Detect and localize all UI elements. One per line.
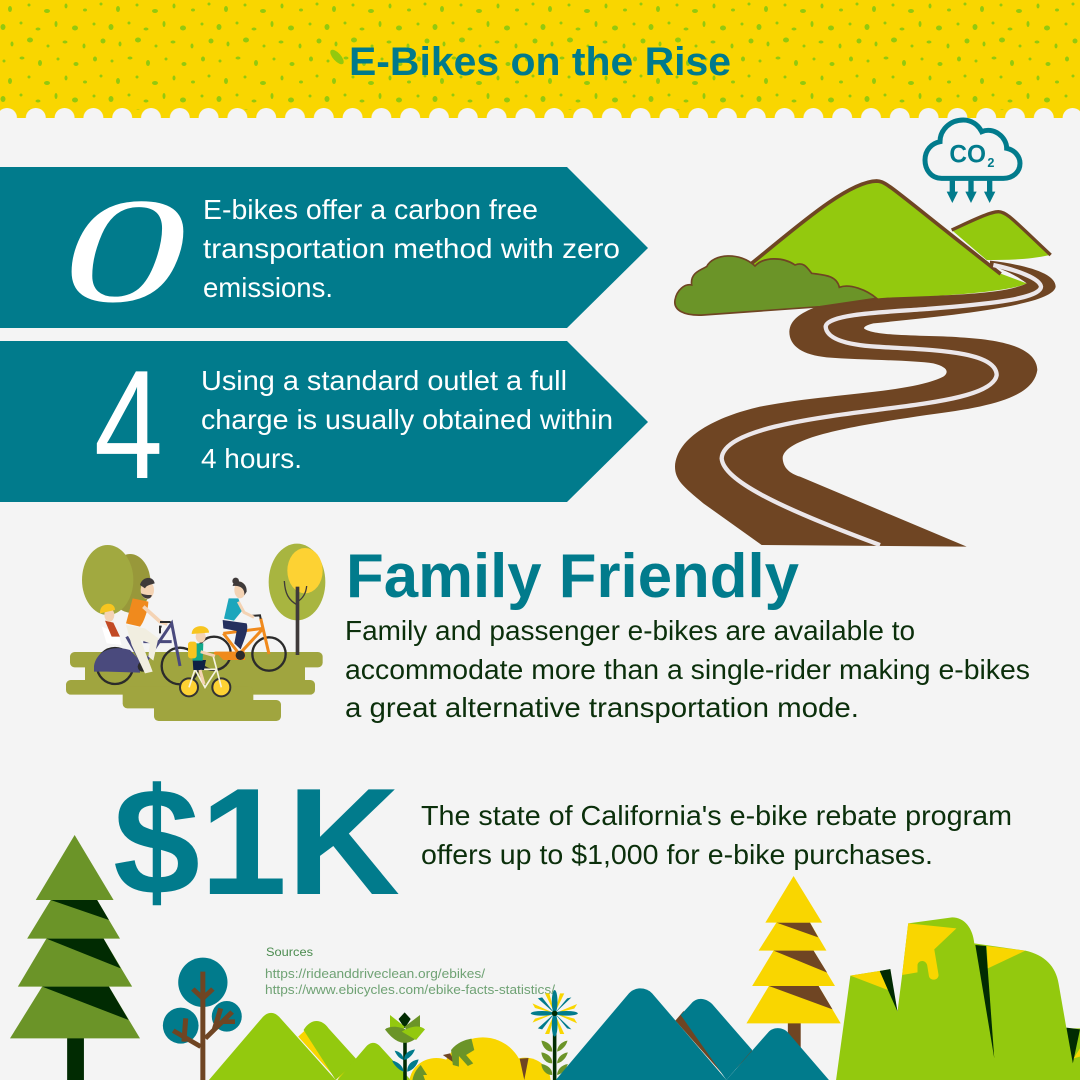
text block: California rebate: The state of California's e-bike rebate program bbox=[421, 800, 1012, 831]
road bbox=[675, 261, 1056, 547]
big stat: $1K: $1K bbox=[113, 757, 400, 927]
sources: https://rideanddriveclean.org/ebikes/ bbox=[265, 967, 486, 981]
green cliffs bbox=[836, 917, 1080, 1080]
panel: four hours arrow banner bbox=[0, 338, 648, 511]
sources bbox=[265, 945, 556, 997]
charge time text: charge is usually obtained within bbox=[201, 404, 613, 435]
big number 4: 4 bbox=[94, 338, 163, 511]
illustration: family riding bikes bbox=[66, 544, 325, 721]
sources: https://www.ebicycles.com/ebike-facts-statistics/ bbox=[265, 983, 556, 997]
zero emissions text: transportation method with zero bbox=[203, 233, 620, 264]
small hill bbox=[952, 212, 1050, 260]
tulip plant bbox=[385, 1012, 425, 1080]
text block: family and passenger e-bikes: accommodate more than a single-rider making e-bikes bbox=[345, 654, 1030, 685]
green pine tree bbox=[10, 835, 140, 1080]
left trees bbox=[109, 554, 151, 613]
daisy flower bbox=[531, 990, 578, 1080]
charge time text: 4 hours. bbox=[201, 443, 302, 474]
zero emissions text: E-bikes offer a carbon free bbox=[203, 194, 538, 225]
child on yellow bike bbox=[180, 626, 230, 696]
yellow bush bbox=[409, 1037, 551, 1080]
header band with speckled pattern and scalloped edge bbox=[0, 0, 1080, 118]
teal mountains bbox=[556, 988, 829, 1080]
right tree bbox=[269, 544, 325, 620]
text block: California rebate: offers up to $1,000 for e-bike purchases. bbox=[421, 839, 933, 870]
bottom right scenery bbox=[531, 876, 1080, 1080]
bush bbox=[675, 256, 877, 315]
zero emissions text bbox=[203, 194, 620, 303]
zero emissions text: emissions. bbox=[203, 272, 333, 303]
text block: family and passenger e-bikes: Family and passenger e-bikes are available to bbox=[345, 615, 915, 646]
green mountains bbox=[209, 1013, 411, 1080]
park ground bbox=[66, 652, 323, 721]
title: E-Bikes on the Rise bbox=[349, 40, 731, 84]
icon: CO2 cloud with arrows: 2 bbox=[987, 156, 994, 170]
text block: California rebate bbox=[421, 800, 1012, 870]
text block: family and passenger e-bikes: a great alternative transportation mode. bbox=[345, 692, 859, 723]
text block: family and passenger e-bikes bbox=[345, 615, 1030, 723]
mother on orange bike bbox=[197, 578, 286, 671]
teal round tree bbox=[163, 958, 242, 1080]
road centre line bbox=[722, 265, 1041, 545]
charge time text bbox=[201, 365, 613, 474]
big number 0: 0 bbox=[62, 168, 186, 334]
heading: Family Friendly: Family Friendly bbox=[346, 542, 800, 611]
illustration: hills and winding road bbox=[675, 181, 1056, 547]
panel: zero emissions arrow banner bbox=[0, 167, 648, 334]
father on purple bike with child seat bbox=[94, 578, 198, 684]
bottom left scenery bbox=[10, 835, 551, 1080]
icon: CO2 cloud with arrows bbox=[925, 120, 1020, 203]
yellow pine tree bbox=[746, 876, 841, 1023]
sources: Sources bbox=[266, 945, 313, 959]
icon: CO2 cloud with arrows: CO bbox=[949, 141, 986, 169]
large hill bbox=[752, 181, 1027, 303]
charge time text: Using a standard outlet a full bbox=[201, 365, 567, 396]
